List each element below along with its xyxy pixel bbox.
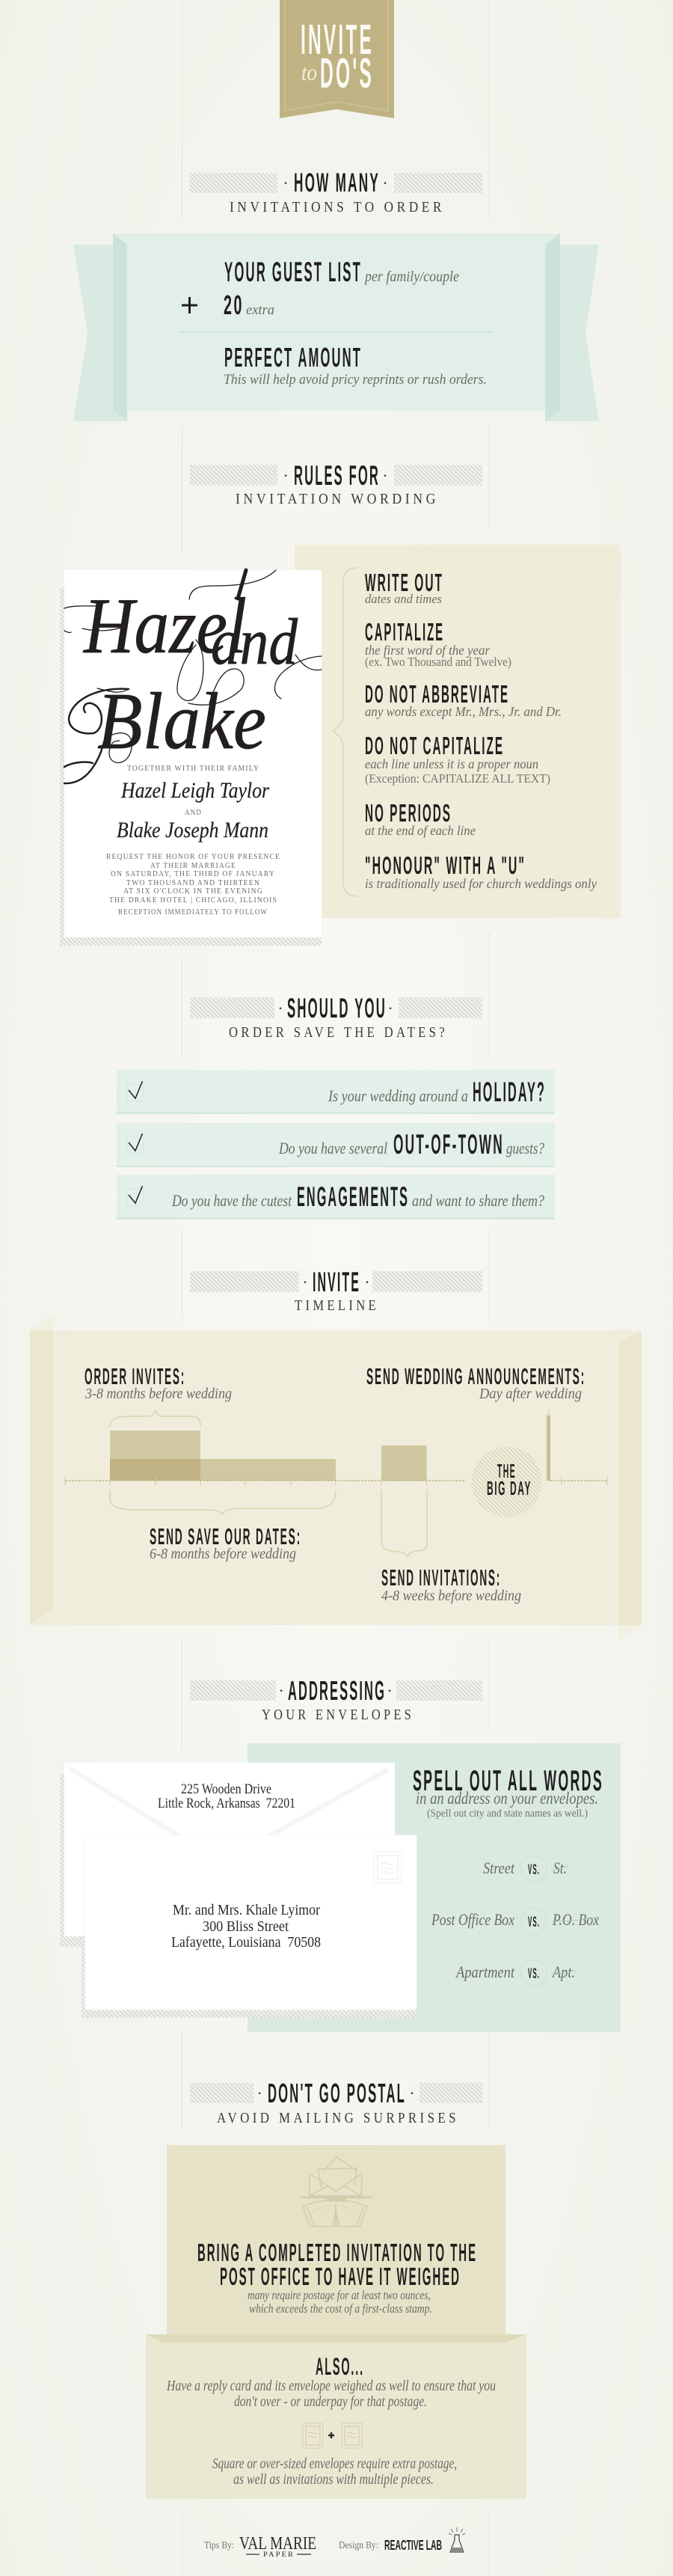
panel: spell out all words: in an address on your envelopes. [416,1789,598,1808]
text: HOLIDAY? [473,1077,546,1107]
logo: reactive lab [384,2527,465,2553]
sample invitation card: Hazel [82,582,247,670]
badge: the big day [471,1447,541,1517]
panel: guest list banner: PERFECT AMOUNT [224,342,362,373]
panel: spell out all words [248,1743,621,2032]
heading: how many invitations to order: INVITATIONS TO ORDER [230,199,445,215]
panel: timeline: 3-8 months before wedding [84,1386,232,1402]
panel: wording rules: any words except Mr., Mrs., Jr. and Dr. [365,704,562,719]
panel: wording rules: (ex. Two Thousand and Twelve) [365,655,511,669]
brace: send invitations [381,1490,427,1557]
panel: guest list banner: YOUR GUEST LIST [224,257,362,287]
row: engagements: ENGAGEMENTS [297,1181,409,1212]
row: street vs st: Street [483,1858,515,1877]
chart: timeline bars [65,1407,607,1485]
heading: invite timeline: · [302,1273,308,1291]
heading: rules for invitation wording: RULES FOR [294,460,380,491]
row: out-of-town: Do you have several [278,1139,387,1157]
logo: reactive lab: REACTIVE LAB [384,2538,442,2553]
heading: don't go postal [190,2078,482,2126]
panel: guest list banner: This will help avoid pricy reprints or rush orders. [224,372,487,388]
envelope: back with return address: 225 Wooden Drive [181,1781,271,1797]
heading: addressing your envelopes: YOUR ENVELOPES [262,1707,414,1723]
heading: how many invitations to order: · [283,174,289,192]
panel: timeline: ORDER INVITES: [84,1363,185,1389]
sample invitation card: REQUEST THE HONOR OF YOUR PRESENCE [106,853,280,861]
heading: addressing your envelopes: · [278,1681,284,1700]
row: street vs st: St. [553,1858,567,1877]
heading: invite timeline: INVITE [313,1267,360,1297]
panel: also [146,2334,526,2499]
heading: don't go postal: · [409,2084,415,2102]
heading: rules for invitation wording [190,460,482,507]
row: holiday: Is your wedding around a [328,1086,468,1105]
checklist: save the date questions [117,1070,555,1220]
panel: bring invitation to post office [167,2145,505,2334]
row: post office box vs p.o. box: Post Office Box [431,1910,514,1929]
heading: rules for invitation wording: · [283,466,289,485]
panel: timeline: 4-8 weeks before wedding [381,1588,521,1604]
footer credits: Tips By: [204,2540,234,2551]
row: out-of-town: OUT-OF-TOWN [393,1129,504,1160]
sample invitation card: Hazel Leigh Taylor [120,778,269,803]
envelope: back with return address [60,1763,395,1947]
logo: val marie paper: PAPER [263,2551,295,2558]
logo: val marie paper [239,2534,316,2558]
heading: don't go postal: · [256,2084,262,2102]
panel: timeline: 6-8 months before wedding [150,1546,296,1562]
brace [333,568,357,896]
envelope: back with return address: Little Rock, Arkansas 72201 [158,1796,295,1811]
heading: invite timeline [190,1267,482,1314]
envelope: front with recipient address: 300 Bliss Street [203,1918,289,1935]
panel: guest list banner: extra [246,302,274,318]
sample invitation card: THE DRAKE HOTEL | CHICAGO, ILLINOIS [109,896,277,905]
footer credits: Design By: [339,2540,378,2551]
row: post office box vs p.o. box: VS. [528,1915,540,1930]
panel: wording rules: DO NOT CAPITALIZE [365,732,504,759]
icon: envelope on scale [301,2157,372,2227]
row: apartment vs apt: Apt. [551,1962,575,1981]
envelope: front with recipient address: Mr. and Mrs. Khale Lyimor [173,1902,320,1918]
heading: how many invitations to order [189,168,482,215]
heading: addressing your envelopes: · [387,1681,393,1700]
title ribbon: Invite to Do's: DO'S [320,49,374,97]
panel: also: as well as invitations with multiple pieces. [233,2471,434,2488]
envelope: front with recipient address [82,1835,417,2018]
row: apartment vs apt [455,1960,577,1986]
row: apartment vs apt: Apartment [455,1962,515,1981]
footer credits [204,2527,465,2558]
row: engagements: Do you have the cutest [171,1191,292,1210]
row: post office box vs p.o. box [431,1908,599,1935]
icon: plus [182,297,197,313]
sample invitation card: AND [185,809,202,817]
panel: wording rules [295,545,621,918]
sample invitation card: ON SATURDAY, THE THIRD OF JANUARY [111,870,275,878]
heading: should you order save the dates: ORDER SAVE THE DATES? [229,1024,448,1041]
panel: timeline: SEND INVITATIONS: [381,1564,501,1591]
row: street vs st [483,1855,568,1882]
heading: invite timeline: TIMELINE [295,1297,379,1314]
heading: don't go postal: DON'T GO POSTAL [268,2078,406,2108]
panel: wording rules: at the end of each line [365,823,476,838]
envelope: front with recipient address: Lafayette, Louisiana 70508 [171,1934,321,1951]
panel: bring invitation to post office: which exceeds the cost of a first-class stamp. [249,2301,432,2316]
sample invitation card: AT SIX O'CLOCK IN THE EVENING [123,887,263,896]
panel: wording rules: the first word of the year [365,643,491,658]
sample invitation card: RECEPTION IMMEDIATELY TO FOLLOW [118,908,268,917]
panel: wording rules: CAPITALIZE [365,618,444,646]
panel: bring invitation to post office: many require postage for at least two ounces, [248,2288,431,2302]
panel: timeline [30,1315,642,1641]
panel: wording rules: WRITE OUT [365,569,443,596]
title ribbon: Invite to Do's: INVITE [301,16,374,64]
badge: the big day: BIG DAY [487,1477,532,1499]
panel: timeline: Day after wedding [479,1386,582,1402]
panel: also: Square or over-sized envelopes require extra postage, [212,2456,457,2472]
panel: timeline: SEND SAVE OUR DATES: [150,1523,301,1549]
sample invitation card: Blake [97,677,266,766]
row: holiday [117,1070,555,1114]
row: engagements [117,1175,555,1220]
heading: should you order save the dates: · [277,999,283,1018]
logo: val marie paper: VAL MARIE [239,2534,316,2554]
row: engagements: and want to share them? [412,1191,544,1210]
heading: should you order save the dates: SHOULD YOU [287,993,387,1024]
panel: wording rules: (Exception: CAPITALIZE ALL TEXT) [365,771,550,786]
heading: should you order save the dates [190,993,482,1041]
row: out-of-town: guests? [506,1139,544,1157]
panel: also: ALSO... [316,2353,364,2380]
panel: wording rules: is traditionally used for church weddings only [365,876,597,891]
heading: how many invitations to order: HOW MANY [294,168,380,198]
icon: stamps [303,2423,362,2448]
heading: invite timeline: · [364,1273,370,1291]
brace: order invites [110,1410,200,1427]
heading: rules for invitation wording: · [382,466,388,485]
brace: save the dates [110,1490,336,1514]
title ribbon: Invite to Do's: to [301,59,317,85]
panel: guest list banner: per family/couple [363,269,459,285]
heading: addressing your envelopes: ADDRESSING [288,1675,386,1706]
title ribbon: Invite to Do's [280,0,394,118]
sample invitation card: TWO THOUSAND AND THIRTEEN [126,879,260,887]
sample invitation card: and [211,606,298,679]
panel: spell out all words: (Spell out city and state names as well.) [427,1808,588,1820]
row: post office box vs p.o. box: P.O. Box [552,1910,599,1929]
heading: how many invitations to order: · [382,174,388,192]
sample invitation card: Blake Joseph Mann [117,818,268,842]
panel: wording rules: dates and times [365,592,442,606]
panel: also: don't over - or underpay for that postage. [234,2393,427,2410]
row: apartment vs apt: VS. [528,1966,540,1982]
heading: rules for invitation wording: INVITATION WORDING [236,491,439,507]
panel: also: Have a reply card and its envelope weighed as well to ensure that you [166,2378,496,2394]
panel: guest list banner [73,233,599,421]
script flourishes [64,570,322,783]
row: out-of-town [117,1123,555,1167]
heading: addressing your envelopes [190,1675,482,1723]
icon: stamp [374,1852,402,1883]
heading: should you order save the dates: · [387,999,393,1018]
panel: wording rules: NO PERIODS [365,799,452,827]
badge: the big day: THE [497,1460,516,1482]
sample invitation card: TOGETHER WITH THEIR FAMILY [127,765,259,773]
panel: wording rules: each line unless it is a proper noun [365,756,538,771]
sample invitation card [60,570,322,946]
panel: wording rules: DO NOT ABBREVIATE [365,680,509,708]
heading: don't go postal: AVOID MAILING SURPRISES [217,2110,459,2126]
sample invitation card: AT THEIR MARRIAGE [150,862,236,870]
row: street vs st: VS. [528,1862,540,1878]
panel: guest list banner: 20 [224,290,244,320]
